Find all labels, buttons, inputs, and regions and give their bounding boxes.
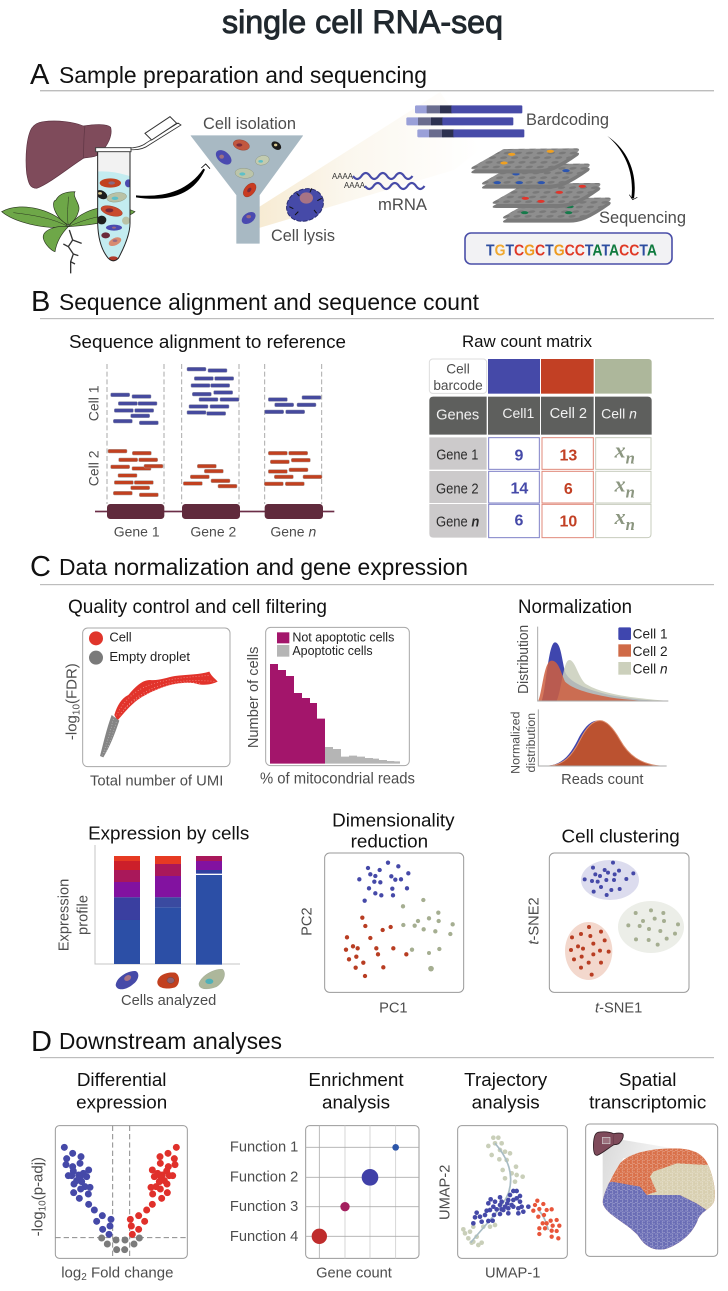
axis labels: Fold change [87, 1264, 173, 1281]
tissue regions [600, 1147, 717, 1253]
title: single cell RNA-seq [222, 4, 503, 40]
axis labels [230, 1140, 392, 1281]
zoom fan [603, 1138, 673, 1200]
axis labels: Normalized [508, 711, 522, 774]
heading: dimensionality reduction: Dimensionality [332, 810, 455, 831]
barcode row [429, 359, 652, 394]
axis labels: Gene n [270, 524, 316, 540]
icon: lysing cell [281, 183, 329, 227]
heading: spatial transcriptomic: Spatial [619, 1069, 676, 1090]
cell clustering [526, 826, 689, 1016]
axis labels: t-SNE1 [595, 1000, 642, 1016]
axis labels: -log [64, 715, 81, 740]
chart: barcode rank scatter [83, 628, 230, 767]
heading: dimensionality reduction: reduction [351, 831, 428, 852]
expression by cells and dimensionality reduction [56, 810, 464, 1016]
section heading A: Sample preparation and sequencing [59, 62, 427, 88]
gene rows: 14 [510, 480, 528, 497]
gene rows: x [615, 437, 626, 462]
panel B: sequence alignment and count [31, 286, 714, 540]
icon: mini liver [593, 1132, 623, 1155]
axis labels [64, 646, 415, 790]
chart: stacked bars [95, 845, 240, 965]
chart: raw distribution: Cell 2 [633, 644, 668, 659]
axis labels: UMAP-1 [485, 1266, 540, 1282]
normalization charts [508, 625, 668, 788]
header row: Cell n [601, 405, 637, 421]
sequence read box [465, 233, 672, 264]
axis labels: distribution [524, 713, 538, 772]
axis labels: Expression [56, 879, 72, 951]
axis labels: log [61, 1264, 81, 1281]
axis labels: Total number of UMI [90, 774, 223, 790]
axis labels: PC2 [300, 907, 316, 936]
heading: enrichment analysis: Enrichment [308, 1069, 404, 1090]
label: bardcoding: Bardcoding [526, 111, 609, 129]
icon: mRNA strands: AAAA [332, 171, 353, 181]
heading: spatial transcriptomic [589, 1069, 706, 1112]
label: mRNA: mRNA [378, 196, 427, 214]
axis labels [86, 385, 316, 540]
header row: Cell1 [502, 405, 534, 421]
axis labels: (p-adj) [30, 1157, 47, 1200]
icon: funnel with cells [191, 136, 303, 243]
arrow: tube to funnel [136, 164, 210, 199]
section heading D: Downstream analyses [59, 1028, 282, 1054]
chart: raw distribution [538, 626, 668, 701]
icon: plant [2, 192, 135, 273]
subheading: alignment: Sequence alignment to reference [69, 331, 346, 352]
axis labels [300, 907, 408, 1016]
axis labels: Cell 1 [86, 385, 102, 421]
QC charts [64, 627, 415, 790]
gene rows: 6 [515, 513, 524, 530]
section heading B: Sequence alignment and sequence count [59, 289, 480, 315]
chart: spatial map [586, 1124, 718, 1256]
label: cell isolation: Cell isolation [203, 115, 296, 133]
chart: mitochondrial read histogram [266, 627, 409, 766]
heading: differential expression: Differential [77, 1069, 166, 1090]
axis labels: profile [75, 895, 91, 935]
axis labels: 10 [37, 1200, 48, 1211]
axis labels: % of mitocondrial reads [260, 770, 415, 787]
chart: volcano plot [55, 1126, 187, 1258]
gene rows: x [615, 471, 626, 496]
subheading: normalization: Normalization [518, 596, 632, 618]
axis labels: Function 4 [230, 1229, 298, 1245]
panel D: downstream analyses [30, 1026, 718, 1283]
axis labels: Cells analyzed [121, 993, 216, 1009]
axis labels [526, 897, 642, 1016]
section heading B: B [31, 286, 50, 318]
chart: PCA scatter [325, 853, 464, 992]
header row: Cell 2 [550, 406, 587, 422]
heading: trajectory analysis: analysis [472, 1091, 540, 1112]
axis labels: Function 3 [230, 1199, 298, 1215]
subheading: matrix: Raw count matrix [462, 332, 592, 351]
gene rows: 13 [559, 448, 577, 465]
section heading A: A [30, 59, 50, 91]
chart: mitochondrial read histogram: Apoptotic cells [292, 644, 373, 658]
chart: barcode rank scatter: Empty droplet [109, 649, 190, 664]
icon: stacked sequencing plates [471, 136, 637, 223]
reads: cell 1 [111, 367, 321, 425]
label: cell lysis: Cell lysis [271, 227, 335, 245]
chart: normalized distribution [538, 709, 667, 766]
axis labels: Gene count [316, 1265, 392, 1281]
heading: expression by cells: Expression by cells [88, 822, 249, 843]
reads: cell 2 [108, 449, 322, 497]
axis labels: 2 [81, 1272, 87, 1283]
heading: differential expression [76, 1069, 167, 1112]
gene rows: 9 [515, 448, 524, 465]
section heading C: Data normalization and gene expression [59, 554, 468, 580]
raw count matrix table [429, 359, 652, 538]
axis labels: Function 2 [230, 1170, 298, 1186]
axis labels: Gene 2 [190, 524, 236, 540]
gene rows: n [626, 515, 635, 534]
barcode row: barcode [433, 378, 483, 393]
gene rows: x [615, 504, 626, 529]
gene rows: n [626, 448, 635, 467]
chart: t-SNE clusters [549, 853, 689, 992]
chart: enrichment dot plot [306, 1126, 419, 1258]
header row [429, 397, 652, 435]
panel C: data normalization and gene expression [30, 551, 714, 1016]
gene rows: 6 [564, 481, 573, 498]
heading: trajectory analysis: Trajectory [464, 1069, 548, 1090]
reference genome with genes [95, 504, 334, 519]
axis labels: PC1 [379, 1000, 408, 1016]
gene rows: n [626, 482, 635, 501]
arrow: barcoding to sequencing [607, 136, 637, 200]
sequence read box: TGTCGCTGCCTATACCTA [486, 242, 657, 260]
axis labels [508, 625, 643, 788]
chart: raw distribution: Cell 1 [633, 626, 668, 641]
section heading D: D [31, 1026, 52, 1058]
gene rows [429, 437, 651, 538]
icon: mRNA strands: AAAA [344, 180, 365, 190]
heading: enrichment analysis [308, 1069, 404, 1112]
axis labels: -log [30, 1211, 47, 1236]
axis labels [30, 1157, 173, 1283]
chart: barcode rank scatter: Cell [109, 630, 132, 645]
icon: mRNA strands [332, 171, 424, 190]
axis labels: Function 1 [230, 1140, 298, 1156]
gene rows: Gene n [436, 515, 480, 531]
chart: raw distribution: Cell n [633, 662, 668, 677]
heading: trajectory analysis [464, 1069, 548, 1112]
sample sources, tube and arrow [2, 117, 329, 273]
section heading C: C [30, 551, 51, 583]
subheading: quality control: Quality control and cell filtering [68, 597, 327, 618]
heading: enrichment analysis: analysis [322, 1091, 390, 1112]
trajectory and spatial [437, 1069, 718, 1282]
icons: analysed cells [116, 969, 225, 989]
icon: tube with cells [94, 117, 181, 267]
barcode row: Cell [446, 361, 470, 376]
barcoded reads [406, 105, 524, 137]
heading: cell clustering: Cell clustering [562, 826, 680, 847]
heading: dimensionality reduction [332, 810, 455, 852]
chart: trajectory UMAP [458, 1126, 567, 1258]
axis labels [56, 879, 216, 1009]
axis labels: Reads count [561, 772, 643, 788]
axis labels: UMAP-2 [437, 1165, 453, 1220]
axis labels [437, 1165, 540, 1282]
panel A: sample preparation and sequencing [2, 59, 714, 273]
heading: differential expression: expression [76, 1091, 167, 1112]
axis labels: Number of cells [246, 646, 262, 748]
axis labels: Cell 2 [86, 450, 102, 486]
icon: liver [26, 121, 111, 188]
axis labels: (FDR) [64, 663, 81, 704]
axis labels: t-SNE2 [526, 897, 542, 945]
chart: mitochondrial read histogram: Not apoptotic cells [292, 630, 394, 644]
heading: spatial transcriptomic: transcriptomic [589, 1091, 706, 1112]
axis labels: Gene 1 [114, 524, 160, 540]
header row: Genes [436, 407, 479, 423]
gene rows: 10 [559, 514, 577, 531]
light beam from funnel [259, 92, 480, 228]
axis labels: Distribution [516, 625, 532, 694]
gene rows: Gene 1 [436, 447, 478, 463]
alignment diagram [86, 364, 334, 540]
axis labels: 10 [71, 704, 82, 715]
label: sequencing: Sequencing [599, 209, 686, 227]
volcano and enrichment [30, 1069, 419, 1283]
gene rows: Gene 2 [436, 481, 479, 497]
